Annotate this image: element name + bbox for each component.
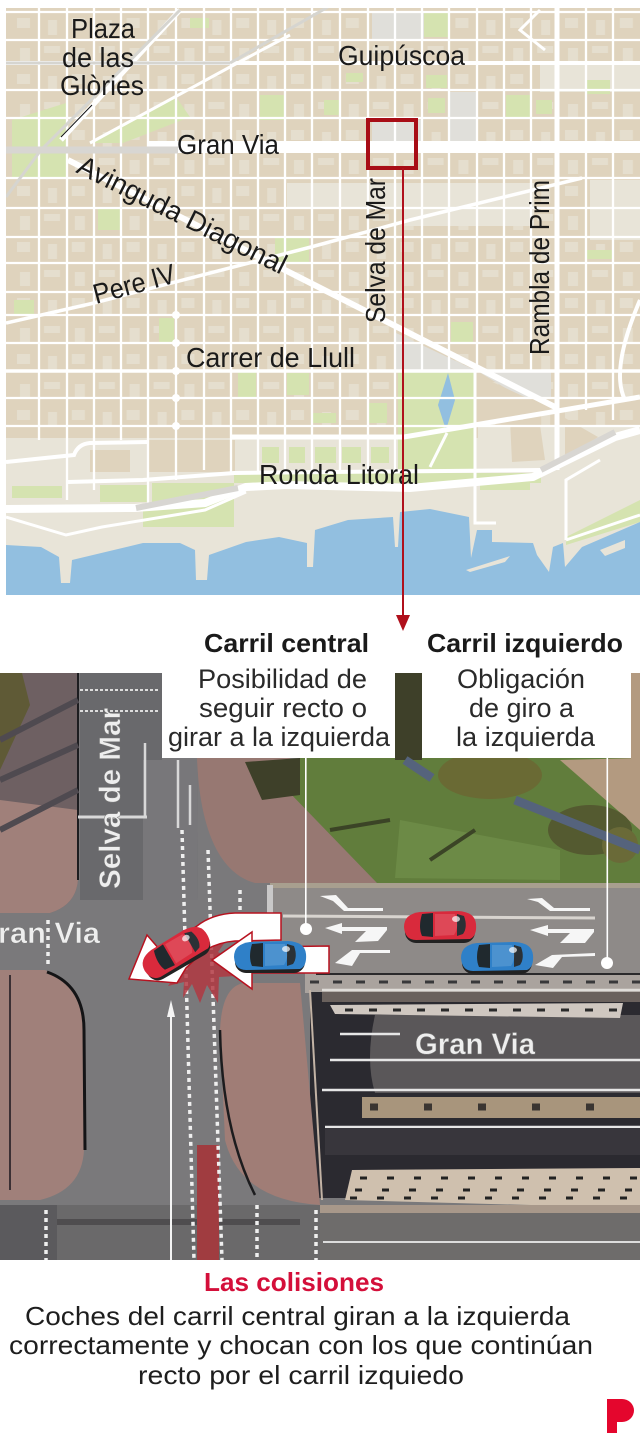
aerial label: Gran Via (left): ran Via [0, 917, 100, 950]
arrow: straight lane [212, 932, 329, 989]
leader: left lane [601, 758, 613, 969]
text: left lane description: Obligación [457, 664, 585, 694]
logo [607, 1399, 634, 1433]
text: central lane description: girar a la izquierda [168, 722, 391, 752]
label box: left lane [422, 660, 631, 758]
text: left lane description: de giro a [469, 693, 575, 723]
text: left lane description: la izquierda [456, 722, 596, 752]
leader: central lane [300, 758, 312, 935]
arrow: straight traffic up [167, 1000, 175, 1260]
impact star [160, 928, 236, 1003]
map label: Guipúscoa: Guipúscoa [338, 40, 465, 71]
map: main roads [6, 8, 640, 540]
map [6, 7, 640, 595]
text: collision explanation [9, 1301, 593, 1390]
map: junction circles [172, 311, 180, 430]
text: central lane description [168, 664, 391, 752]
arrow: locator to aerial [396, 168, 410, 631]
heading: Carril izquierdo: Carril izquierdo [427, 628, 623, 658]
aerial: Gran Via upper lanes [270, 885, 640, 973]
map label: Carrer de Llull: Carrer de Llull [186, 342, 355, 373]
map: lake [438, 373, 455, 430]
aerial: tunnel [310, 992, 640, 1198]
aerial: central sidewalks [220, 983, 320, 1205]
map label: Rambla de Prim: Rambla de Prim [524, 180, 555, 355]
label box: central lane [162, 660, 395, 758]
car: blue colliding [234, 941, 306, 973]
map: street grid [6, 8, 640, 505]
aerial: top-left sidewalk [0, 673, 77, 810]
aerial: beige building [345, 1168, 640, 1208]
arrow: turning lane [129, 913, 281, 983]
car: red colliding [137, 921, 215, 985]
map label: Pere IV: Pere IV [90, 258, 179, 310]
car: blue in lane [461, 942, 533, 974]
text: collision explanation: correctamente y chocan con los que continúan [9, 1330, 593, 1360]
map label: Gran Via: Gran Via [177, 129, 279, 160]
text: collision explanation: recto por el carril izquiedo [138, 1360, 464, 1390]
text: left lane description [456, 664, 596, 752]
heading: Las colisiones: Las colisiones [204, 1267, 384, 1297]
map label: Avinguda Diagonal: Avinguda Diagonal [72, 150, 292, 280]
aerial: road arrows [320, 895, 595, 968]
aerial label: Gran Via (right): Gran Via [415, 1028, 535, 1061]
map: sea [6, 509, 640, 595]
map: parks and green blocks [12, 12, 640, 545]
aerial label: Selva de Mar: Selva de Mar [94, 708, 127, 889]
map label: Plaza de las Glòries [60, 13, 144, 101]
aerial view [0, 673, 640, 1260]
map label: Selva de Mar: Selva de Mar [360, 178, 391, 323]
heading: Carril central: Carril central [204, 628, 369, 658]
car: red in lane [404, 911, 476, 943]
map label: Plaza de las Glòries: Glòries [60, 70, 144, 101]
map label: Plaza de las Glòries: Plaza [71, 13, 135, 44]
leader line: Glòries [61, 105, 92, 137]
aerial: pink corner sidewalk [197, 758, 377, 883]
map label: Ronda Litoral: Ronda Litoral [259, 459, 419, 490]
text: central lane description: seguir recto o [199, 693, 367, 723]
aerial: Selva de Mar road [80, 673, 162, 900]
aerial: cycle lane [197, 1145, 219, 1260]
aerial: lawn [287, 758, 640, 883]
map label: Plaza de las Glòries: de las [62, 42, 134, 73]
aerial: crossings [46, 830, 316, 1260]
locator box [368, 120, 416, 168]
text: collision explanation: Coches del carril central giran a la izquierda [25, 1301, 571, 1331]
text: central lane description: Posibilidad de [198, 664, 367, 694]
aerial: wall strip [305, 973, 640, 993]
